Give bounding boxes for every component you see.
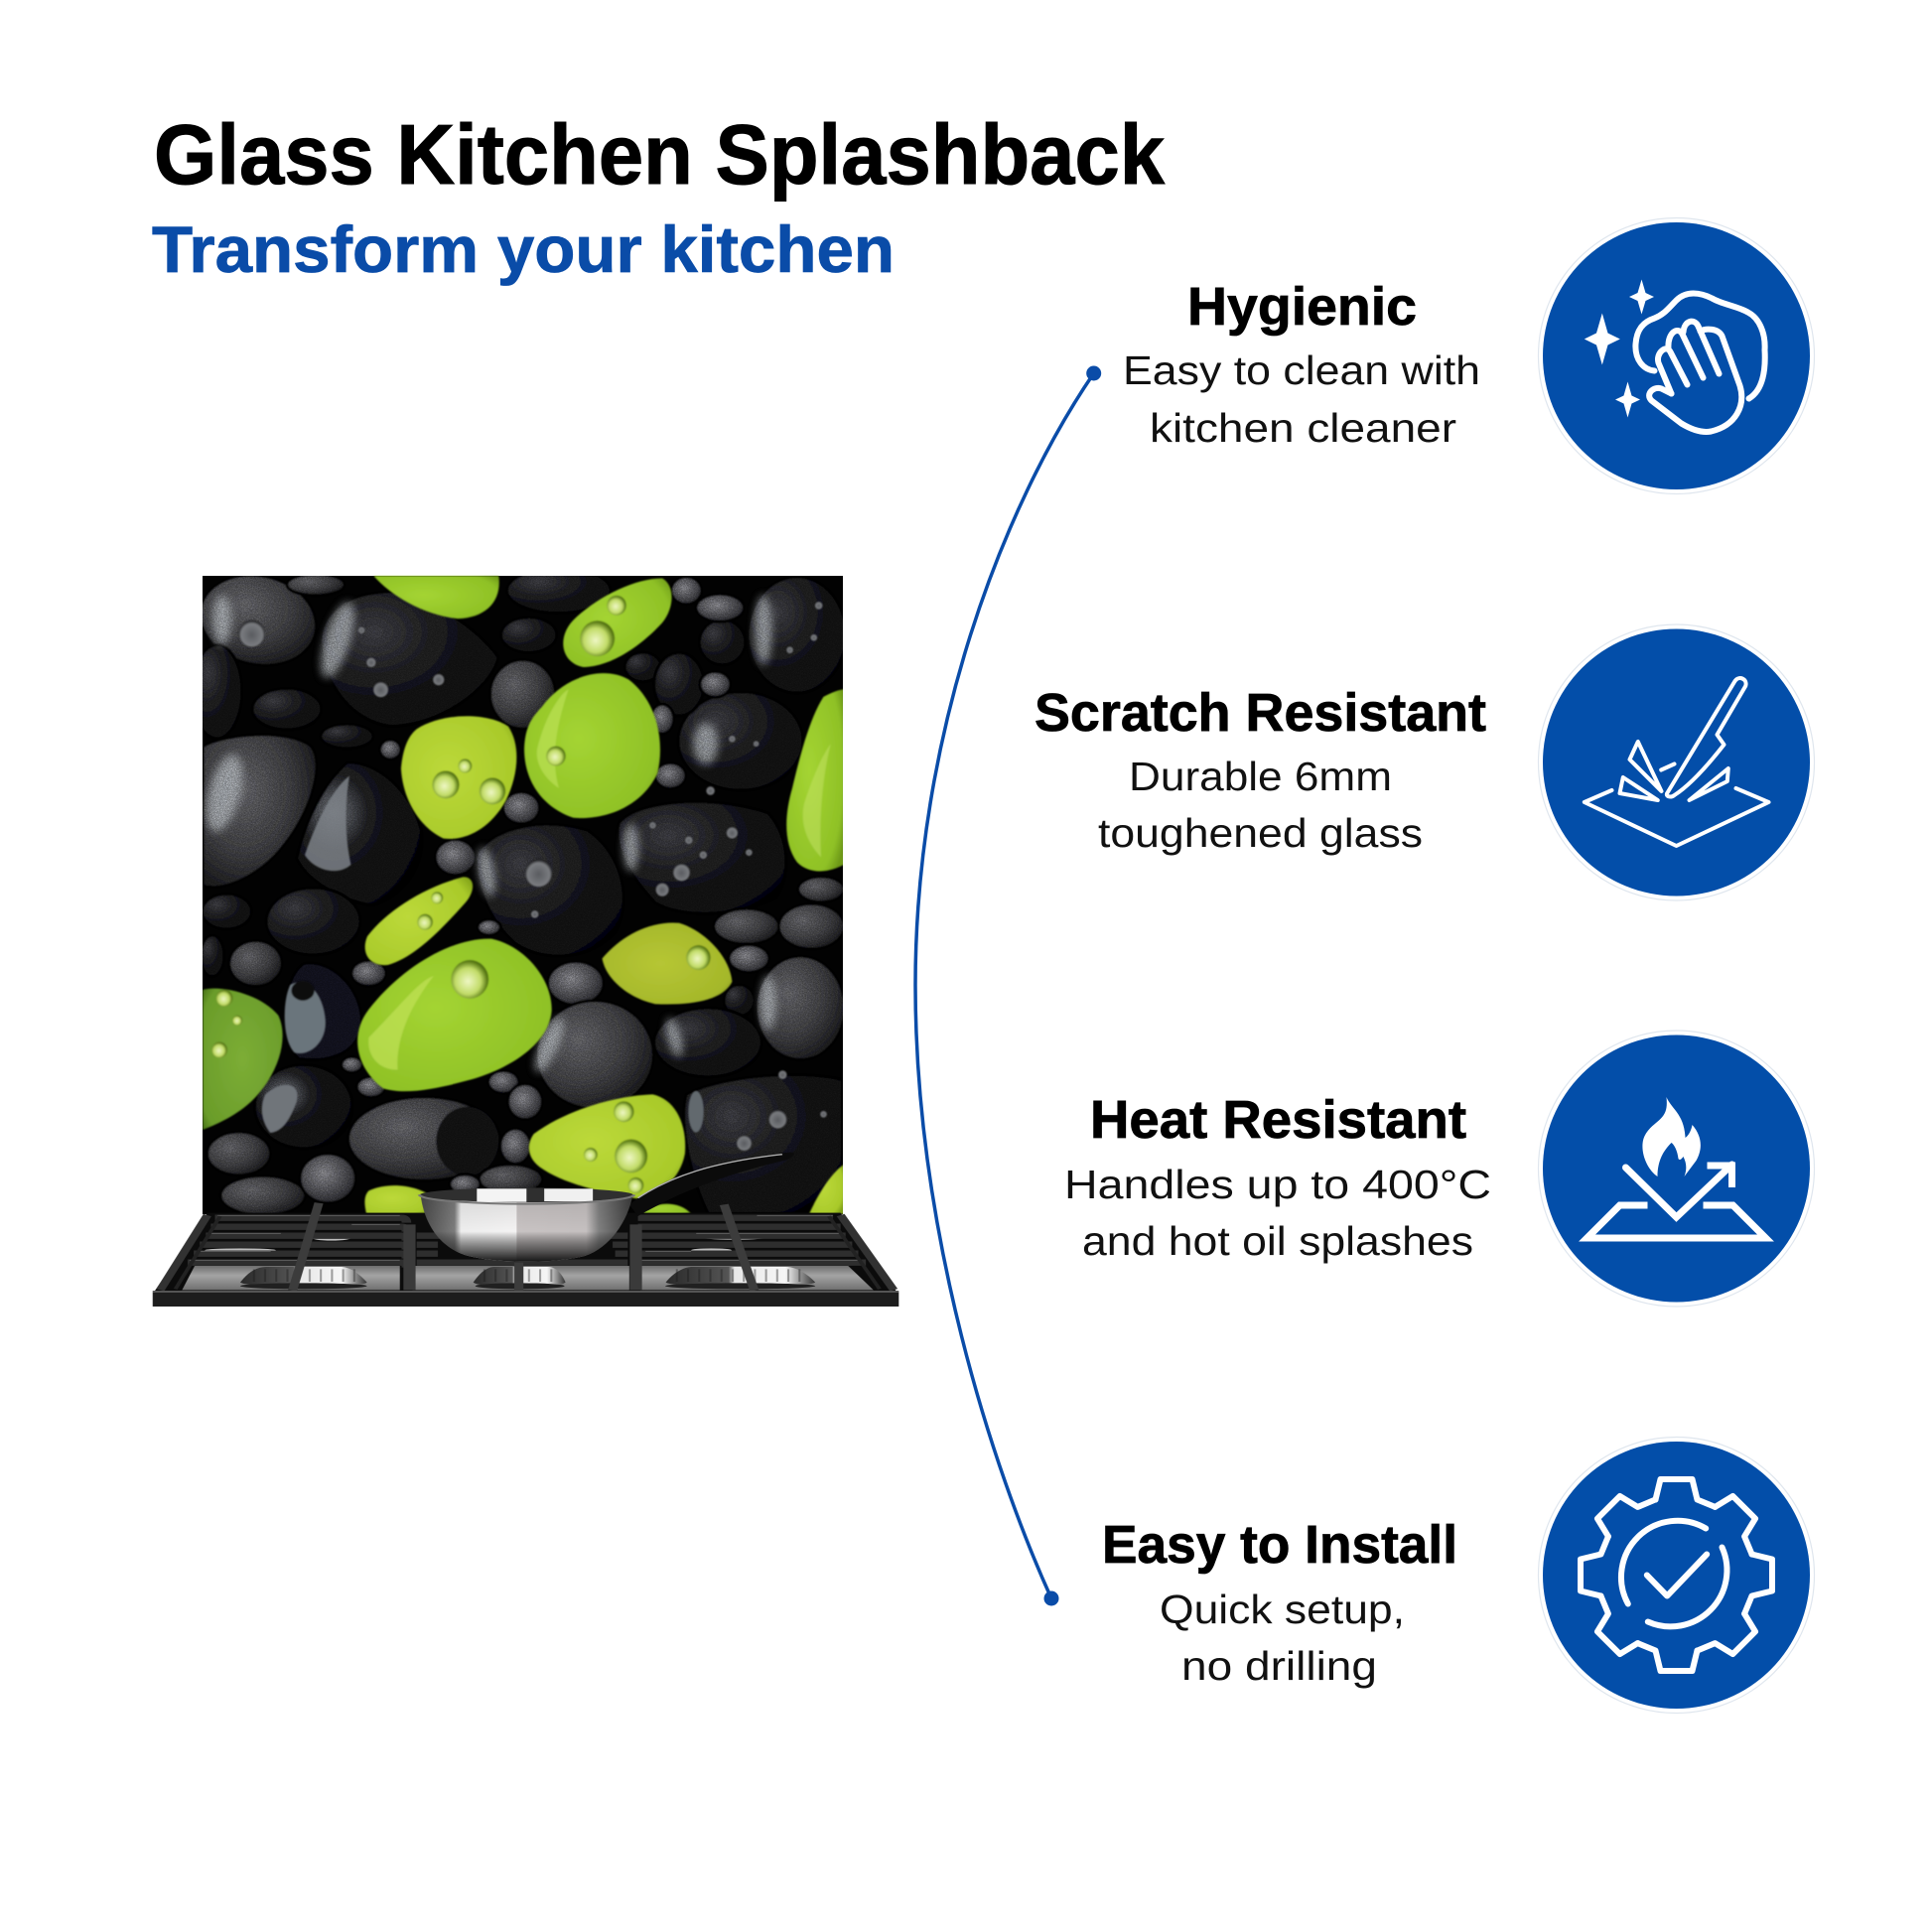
feature text: Hygienic: kitchen cleaner xyxy=(1150,405,1456,451)
burners xyxy=(240,1267,815,1289)
feature text: Hygienic xyxy=(1123,277,1480,451)
product image: splashback above a gas hob xyxy=(153,564,898,1307)
icon: gear with check mark xyxy=(1539,1438,1815,1714)
feature text: Heat Resistant xyxy=(1064,1090,1491,1264)
icon: flame over heat-resistant surface xyxy=(1539,1031,1815,1307)
small rear burners xyxy=(205,1233,769,1252)
feature text: Scratch Resistant: Durable 6mm xyxy=(1129,754,1392,799)
feature text: Scratch Resistant: toughened glass xyxy=(1098,810,1423,856)
water droplets on dark xyxy=(239,602,827,1151)
feature text: Heat Resistant: Heat Resistant xyxy=(1090,1090,1466,1150)
feature text: Easy to Install: no drilling xyxy=(1181,1643,1377,1689)
hob top xyxy=(153,1213,897,1294)
feature text: Heat Resistant: and hot oil splashes xyxy=(1082,1218,1473,1264)
front edge xyxy=(153,1293,898,1307)
green stones xyxy=(373,576,499,619)
feature text: Hygienic: Easy to clean with xyxy=(1123,347,1480,393)
grate bars xyxy=(160,1203,894,1291)
feature text: Scratch Resistant: Scratch Resistant xyxy=(1035,683,1486,743)
water droplets on green xyxy=(211,596,711,1193)
title: Glass Kitchen Splashback xyxy=(154,108,1166,203)
feature text: Hygienic: Hygienic xyxy=(1187,277,1417,337)
connector curve with end dots xyxy=(915,365,1101,1606)
icon: hand wiping with sparkles xyxy=(1539,218,1815,494)
gas hob with pan xyxy=(153,1153,898,1307)
subtitle: Transform your kitchen xyxy=(152,212,895,286)
soft highlights on dark stones xyxy=(200,596,776,1075)
gloss on green stones xyxy=(368,976,434,1069)
feature text: Easy to Install: Easy to Install xyxy=(1102,1515,1457,1575)
feature text: Easy to Install xyxy=(1102,1515,1457,1689)
feature text: Heat Resistant: Handles up to 400°C xyxy=(1064,1162,1491,1207)
burner wells xyxy=(182,1266,874,1290)
feature text: Scratch Resistant xyxy=(1035,683,1486,856)
grain xyxy=(203,576,843,1214)
splashback panel: black and green pebbles xyxy=(192,564,846,1215)
pan body xyxy=(419,1187,634,1262)
pan handle xyxy=(629,1153,794,1216)
feature text: Easy to Install: Quick setup, xyxy=(1160,1587,1405,1632)
shiny highlights xyxy=(305,775,351,871)
icon: knife scratching glass xyxy=(1539,624,1815,900)
